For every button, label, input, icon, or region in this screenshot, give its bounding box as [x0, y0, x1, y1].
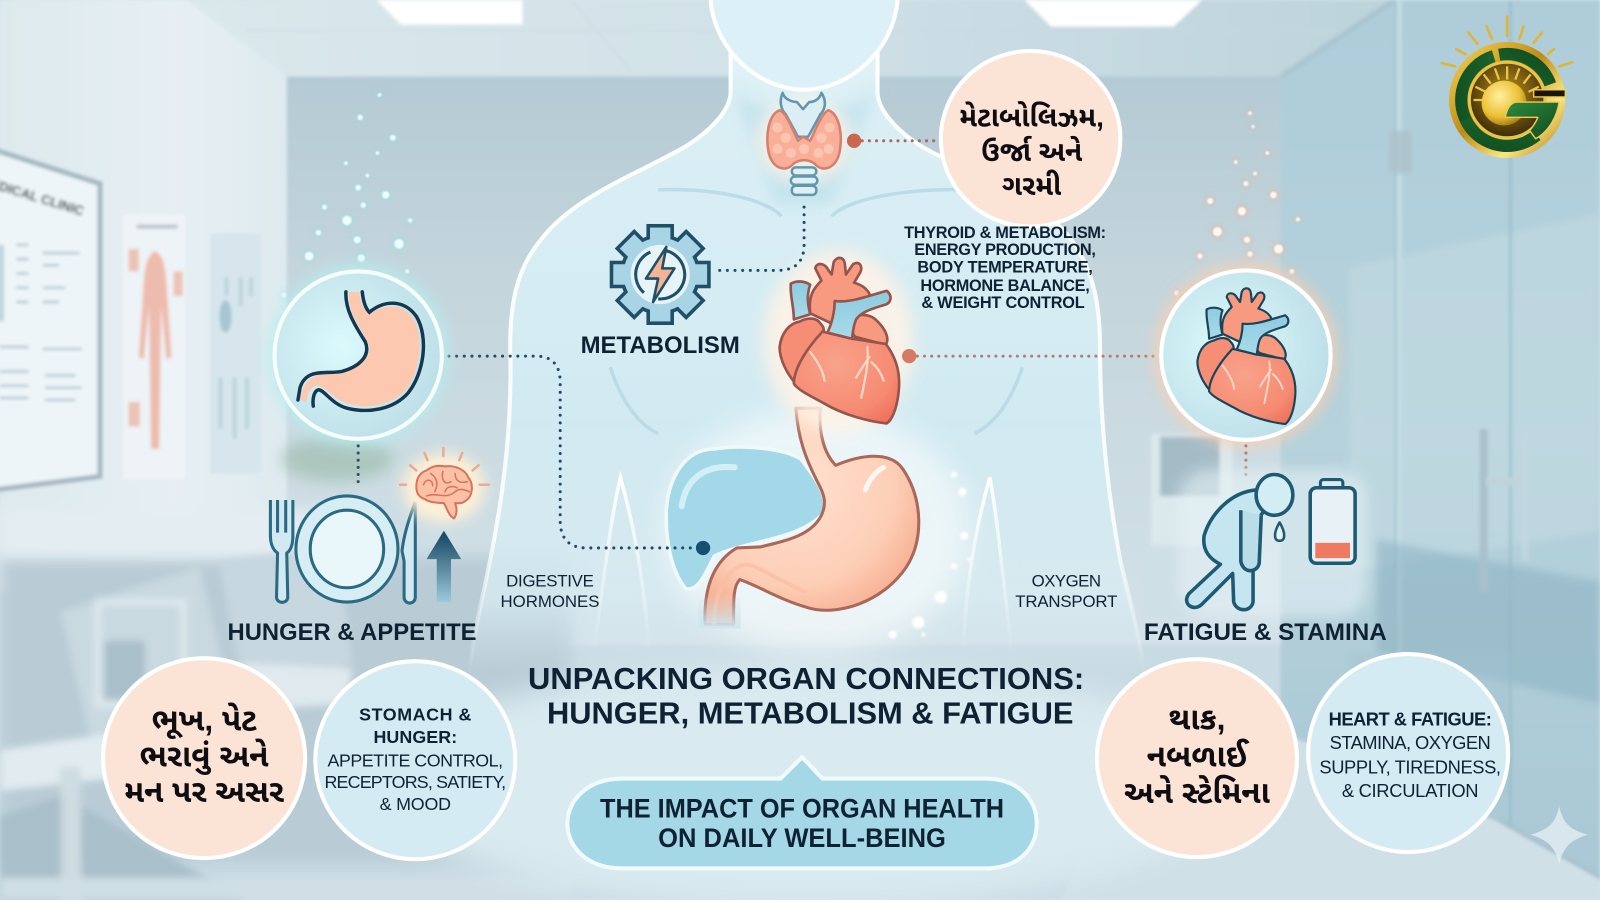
badge: metabolism gujarati: મેટાબોલિઝમ, — [959, 101, 1104, 133]
plant — [281, 437, 393, 482]
organ: liver — [663, 408, 969, 653]
badge: metabolism gujarati: ગરમી — [1002, 170, 1062, 201]
circle: heart icon — [1156, 265, 1336, 445]
icon: fork, plate and knife — [270, 496, 415, 603]
badge: metabolism gujarati — [941, 51, 1120, 227]
whiteboard — [0, 150, 100, 490]
text: digestive hormones: HORMONES — [501, 592, 599, 611]
badge: fatigue gujarati: થાક, — [1168, 701, 1225, 737]
organ: heart — [763, 250, 914, 434]
title: UNPACKING ORGAN CONNECTIONS: — [528, 662, 1084, 696]
badge: heart and fatigue: HEART & FATIGUE: — [1329, 709, 1492, 730]
connector: heart circle to fatigue — [1244, 446, 1247, 480]
label: fatigue and stamina: FATIGUE & STAMINA — [1144, 619, 1387, 646]
connector: thyroid to metabolism badge — [847, 134, 941, 148]
neck shading — [731, 87, 878, 204]
icon: tired person — [1179, 469, 1367, 617]
badge: heart and fatigue — [1308, 654, 1508, 852]
badge: heart and fatigue: SUPPLY, TIREDNESS, — [1319, 756, 1501, 777]
callout pill — [567, 757, 1037, 868]
logo: golden sun G — [1442, 16, 1572, 165]
connector: stomach circle to liver — [449, 356, 710, 555]
callout pill: THE IMPACT OF ORGAN HEALTH — [600, 793, 1004, 823]
back wall — [287, 73, 1287, 645]
connector: thyroid to metabolism gear — [717, 207, 804, 270]
particles: hunger — [281, 93, 412, 297]
icon: metabolism gear — [613, 228, 707, 321]
badge: stomach and hunger: RECEPTORS, SATIETY, — [324, 772, 506, 792]
monitor and cart — [1143, 434, 1245, 617]
icon: up arrow — [427, 531, 461, 602]
callout pill: ON DAILY WELL-BEING — [658, 823, 946, 853]
icon: stomach — [298, 292, 423, 410]
badge: metabolism gujarati: ઉર્જા અને — [981, 135, 1082, 167]
text: oxygen transport: OXYGEN — [1032, 572, 1101, 591]
particles around stomach — [889, 471, 971, 639]
text: thyroid and metabolism: BODY TEMPERATURE, — [917, 258, 1093, 276]
badge: fatigue gujarati: નબળાઈ — [1147, 737, 1250, 773]
organ chart poster — [210, 234, 261, 473]
glass wall — [1061, 0, 1600, 900]
human body silhouette — [469, 0, 1145, 673]
ceiling panels and lights — [245, 0, 1600, 73]
left wall — [0, 0, 287, 592]
icon: low battery — [1310, 480, 1355, 563]
decorative sparkle — [1531, 806, 1588, 864]
label: metabolism: METABOLISM — [581, 332, 740, 359]
label: hunger and appetite: HUNGER & APPETITE — [228, 619, 477, 646]
badge: heart and fatigue: STAMINA, OXYGEN — [1330, 732, 1491, 753]
thyroid gland — [755, 93, 853, 195]
badge: hunger gujarati: મન પર અસર — [124, 773, 285, 809]
anatomy poster — [121, 213, 187, 481]
text: thyroid and metabolism: THYROID & METABOLISM: — [904, 224, 1106, 242]
badge: stomach and hunger: & MOOD — [380, 794, 451, 814]
connector: stomach circle to plate — [357, 446, 360, 483]
inner arm lines — [594, 478, 1012, 653]
title: HUNGER, METABOLISM & FATIGUE — [547, 696, 1073, 730]
collarbones and chest — [610, 190, 1022, 434]
circle: stomach icon — [268, 265, 448, 445]
badge: hunger gujarati: ભૂખ, પેટ — [152, 702, 257, 739]
badge: fatigue gujarati — [1097, 659, 1297, 857]
text: thyroid and metabolism: ENERGY PRODUCTION, — [914, 241, 1096, 259]
organ: stomach — [698, 408, 919, 629]
text: thyroid and metabolism: HORMONE BALANCE, — [920, 277, 1090, 295]
head — [710, 0, 898, 90]
badge: stomach and hunger: APPETITE CONTROL, — [328, 750, 503, 770]
text: thyroid and metabolism: & WEIGHT CONTROL — [921, 294, 1085, 312]
badge: stomach and hunger — [315, 661, 515, 859]
badge: hunger gujarati: ભરાવું અને — [140, 737, 269, 774]
badge: hunger gujarati — [103, 658, 305, 858]
particles: fatigue — [1174, 111, 1300, 295]
connector: heart to heart circle — [902, 349, 1158, 363]
icon: brain with rays — [400, 448, 489, 522]
ceiling — [187, 0, 1394, 77]
text: digestive hormones: DIGESTIVE — [506, 572, 594, 591]
green C band — [1442, 35, 1572, 165]
waiting chairs — [0, 510, 571, 900]
badge: heart and fatigue: & CIRCULATION — [1342, 780, 1479, 801]
badge: fatigue gujarati: અને સ્ટેમિના — [1124, 774, 1271, 810]
text: oxygen transport: TRANSPORT — [1015, 592, 1117, 611]
badge: stomach and hunger: STOMACH & — [359, 704, 472, 724]
badge: stomach and hunger: HUNGER: — [373, 727, 457, 747]
